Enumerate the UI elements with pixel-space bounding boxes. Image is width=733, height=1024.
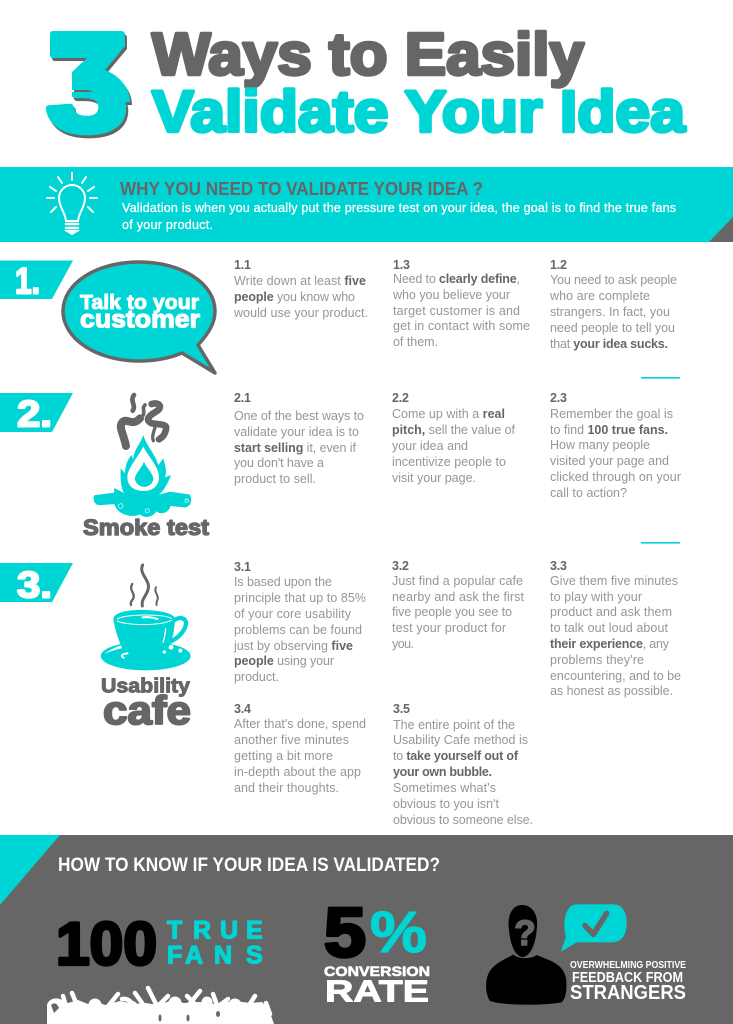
flame inner white xyxy=(127,447,159,491)
text 2.3 xyxy=(550,391,681,500)
text 3.5: obvious to you isn't xyxy=(393,797,500,811)
text 3.4: 3.4 xyxy=(234,702,251,716)
icon: anonymous person xyxy=(486,904,566,1005)
section 2 xyxy=(0,391,681,540)
ribbon: 2 xyxy=(0,393,73,434)
stat: 5% conversion rate: RATE xyxy=(325,974,429,1008)
text 3.1: just by observing five xyxy=(233,639,353,653)
panel: how to know if validated xyxy=(0,835,733,1024)
text 2.3: to find 100 true fans. xyxy=(550,423,668,437)
text 3.1 xyxy=(233,560,366,684)
icon: light bulb xyxy=(47,173,97,234)
banner text: of your product. xyxy=(122,218,213,232)
text 1.1: people you know who xyxy=(234,290,355,304)
text 1.2: You need to ask people xyxy=(550,273,677,287)
flame drop xyxy=(135,462,153,487)
icon: crowd silhouette xyxy=(47,988,274,1024)
text 3.2: Just find a popular cafe xyxy=(392,574,523,588)
text 2.1 xyxy=(234,391,364,486)
text 3.1: problems can be found xyxy=(234,623,362,637)
text 2.3: visited your page and xyxy=(550,454,669,468)
text 1.3: of them. xyxy=(393,335,438,349)
text 3.2 xyxy=(392,559,525,651)
text 2.2: 2.2 xyxy=(392,391,409,405)
big numeral 3 xyxy=(46,31,132,138)
feedback text: OVERWHELMING POSITIVE xyxy=(570,960,686,971)
text 3.4: another five minutes xyxy=(234,733,349,747)
stat: 5% conversion rate: % xyxy=(370,900,427,965)
text 2.1: validate your idea is to xyxy=(234,425,359,439)
text 2.3: How many people xyxy=(550,438,650,452)
speech bubble: talk to your customer xyxy=(63,262,215,373)
text 3.5: Sometimes what's xyxy=(393,781,496,795)
text 1.3: who you believe your xyxy=(392,288,510,302)
text 3.4: After that's done, spend xyxy=(234,717,366,731)
ribbon: 3 xyxy=(0,563,73,606)
cup highlights xyxy=(117,615,172,658)
text 1.2: who are complete xyxy=(549,289,650,303)
text 3.5: 3.5 xyxy=(393,702,410,716)
text 3.5 xyxy=(393,702,533,827)
big numeral 3: 3 xyxy=(48,24,130,160)
text 1.2: that your idea sucks. xyxy=(550,337,668,351)
text 3.3: as honest as possible. xyxy=(550,684,673,698)
text 3.4: getting a bit more xyxy=(234,749,333,763)
ribbon: 1: 1. xyxy=(15,260,40,302)
text 3.2: 3.2 xyxy=(392,559,409,573)
logs xyxy=(94,489,190,516)
text 1.2: need people to tell you xyxy=(550,321,675,335)
text 2.1: product to sell. xyxy=(234,472,316,486)
big numeral 3: 3 xyxy=(46,21,128,157)
text 1.2: 1.2 xyxy=(550,258,567,272)
text 3.3: encountering, and to be xyxy=(550,669,681,683)
text 3.1: product. xyxy=(234,670,279,684)
title line 2: Validate Your Idea xyxy=(152,80,686,144)
feedback text: FEEDBACK FROM xyxy=(572,970,683,986)
smoke xyxy=(121,395,166,446)
text 2.1: One of the best ways to xyxy=(234,409,364,423)
feedback text: STRANGERS xyxy=(570,982,686,1004)
speech bubble: talk to your customer: Talk to your xyxy=(80,292,199,314)
text 3.4: and their thoughts. xyxy=(234,781,339,795)
text 3.1: Is based upon the xyxy=(234,575,332,589)
text 3.4: in-depth about the app xyxy=(234,765,361,779)
text 2.1: you don't have a xyxy=(234,456,324,470)
text 1.3: get in contact with some xyxy=(393,319,530,333)
icon: coffee cup xyxy=(101,565,191,670)
text 3.3: to talk out loud about xyxy=(550,621,669,635)
stat: 100 true fans: 100 xyxy=(56,910,157,978)
saucer xyxy=(101,642,191,670)
text 1.1: Write down at least five xyxy=(234,274,366,288)
text 3.3 xyxy=(550,559,681,698)
section 1 xyxy=(0,258,677,373)
text 3.1: 3.1 xyxy=(234,560,251,574)
usability cafe label xyxy=(101,676,191,733)
text 1.1: would use your product. xyxy=(233,306,368,320)
icon: campfire with smoke xyxy=(94,395,190,516)
flame xyxy=(121,435,171,497)
text 2.3: Remember the goal is xyxy=(550,407,673,421)
ribbon: 1 xyxy=(0,260,73,302)
text 2.2: your idea and xyxy=(392,439,468,453)
icon: anonymous person: ? xyxy=(514,914,536,953)
text 3.2: five people you see to xyxy=(392,605,512,619)
stat: 5% conversion rate: CONVERSION xyxy=(324,963,430,979)
usability cafe label: cafe xyxy=(103,689,191,733)
title line 1: Ways to Easily xyxy=(152,22,584,88)
ribbon: 3: 3. xyxy=(17,564,52,606)
speech bubble: talk to your customer: customer xyxy=(80,306,200,334)
text 3.2: you. xyxy=(392,637,414,651)
text 3.4 xyxy=(234,702,366,795)
text 2.2: Come up with a real xyxy=(392,407,505,421)
text 3.5: obvious to someone else. xyxy=(393,813,533,827)
text 3.3: their experience, any xyxy=(550,637,670,651)
text 3.2: nearby and ask the first xyxy=(392,590,525,604)
text 2.3: clicked through on your xyxy=(550,470,681,484)
text 1.3: 1.3 xyxy=(393,258,410,272)
ribbon: 2: 2. xyxy=(17,394,52,434)
banner heading: WHY YOU NEED TO VALIDATE YOUR IDEA ? xyxy=(120,179,483,199)
text 1.2 xyxy=(549,258,677,351)
text 3.3: problems they're xyxy=(550,653,644,667)
stat: 100 true fans xyxy=(56,910,263,978)
stat: positive feedback from strangers xyxy=(486,904,686,1005)
text 2.2 xyxy=(392,391,516,485)
icon: speech bubble with check xyxy=(561,904,627,952)
panel: why validate banner xyxy=(0,167,733,242)
usability cafe label: Usability xyxy=(101,676,191,698)
text 3.2: test your product for xyxy=(392,621,506,635)
text 1.3 xyxy=(392,258,530,349)
text 1.3: target customer is and xyxy=(393,304,520,318)
handle xyxy=(167,618,186,643)
text 3.5: The entire point of the xyxy=(393,718,515,732)
text 3.3: to play with your xyxy=(550,590,642,604)
text 1.2: strangers. In fact, you xyxy=(550,305,670,319)
cup xyxy=(113,610,175,665)
text 1.1: 1.1 xyxy=(234,258,251,272)
text 2.2: incentivize people to xyxy=(392,455,506,469)
text 1.1 xyxy=(233,258,368,320)
banner text: Validation is when you actually put the pressure test on your idea, the goal is to find the true fans xyxy=(122,201,676,215)
text 3.5: to take yourself out of xyxy=(393,749,519,763)
text 2.3: call to action? xyxy=(550,486,627,500)
text 2.2: visit your page. xyxy=(392,471,476,485)
section 3 xyxy=(0,559,681,827)
text 3.1: people using your xyxy=(234,654,334,668)
text 2.1: start selling it, even if xyxy=(234,441,357,455)
text 3.5: Usability Cafe method is xyxy=(393,733,528,747)
stat: 5% conversion rate: 5 xyxy=(324,894,366,972)
text 3.3: 3.3 xyxy=(550,559,567,573)
stat: 5% conversion rate xyxy=(324,894,430,1008)
text 3.3: product and ask them xyxy=(550,605,672,619)
text 3.5: your own bubble. xyxy=(393,765,492,779)
stat: 100 true fans: TRUE xyxy=(167,916,263,944)
steam xyxy=(131,565,158,606)
footer heading: HOW TO KNOW IF YOUR IDEA IS VALIDATED? xyxy=(58,855,440,876)
banner text xyxy=(122,201,676,232)
text 2.2: pitch, sell the value of xyxy=(392,423,516,437)
smoke test label: Smoke test xyxy=(83,515,210,540)
text 3.1: principle that up to 85% xyxy=(234,591,366,605)
text 1.3: Need to clearly define, xyxy=(393,272,520,286)
text 3.1: of your core usability xyxy=(234,607,352,621)
feedback text xyxy=(570,960,686,1004)
stat: 100 true fans: FANS xyxy=(167,942,263,970)
text 2.1: 2.1 xyxy=(234,391,251,405)
title xyxy=(46,30,688,138)
text 3.3: Give them five minutes xyxy=(550,574,678,588)
text 2.3: 2.3 xyxy=(550,391,567,405)
